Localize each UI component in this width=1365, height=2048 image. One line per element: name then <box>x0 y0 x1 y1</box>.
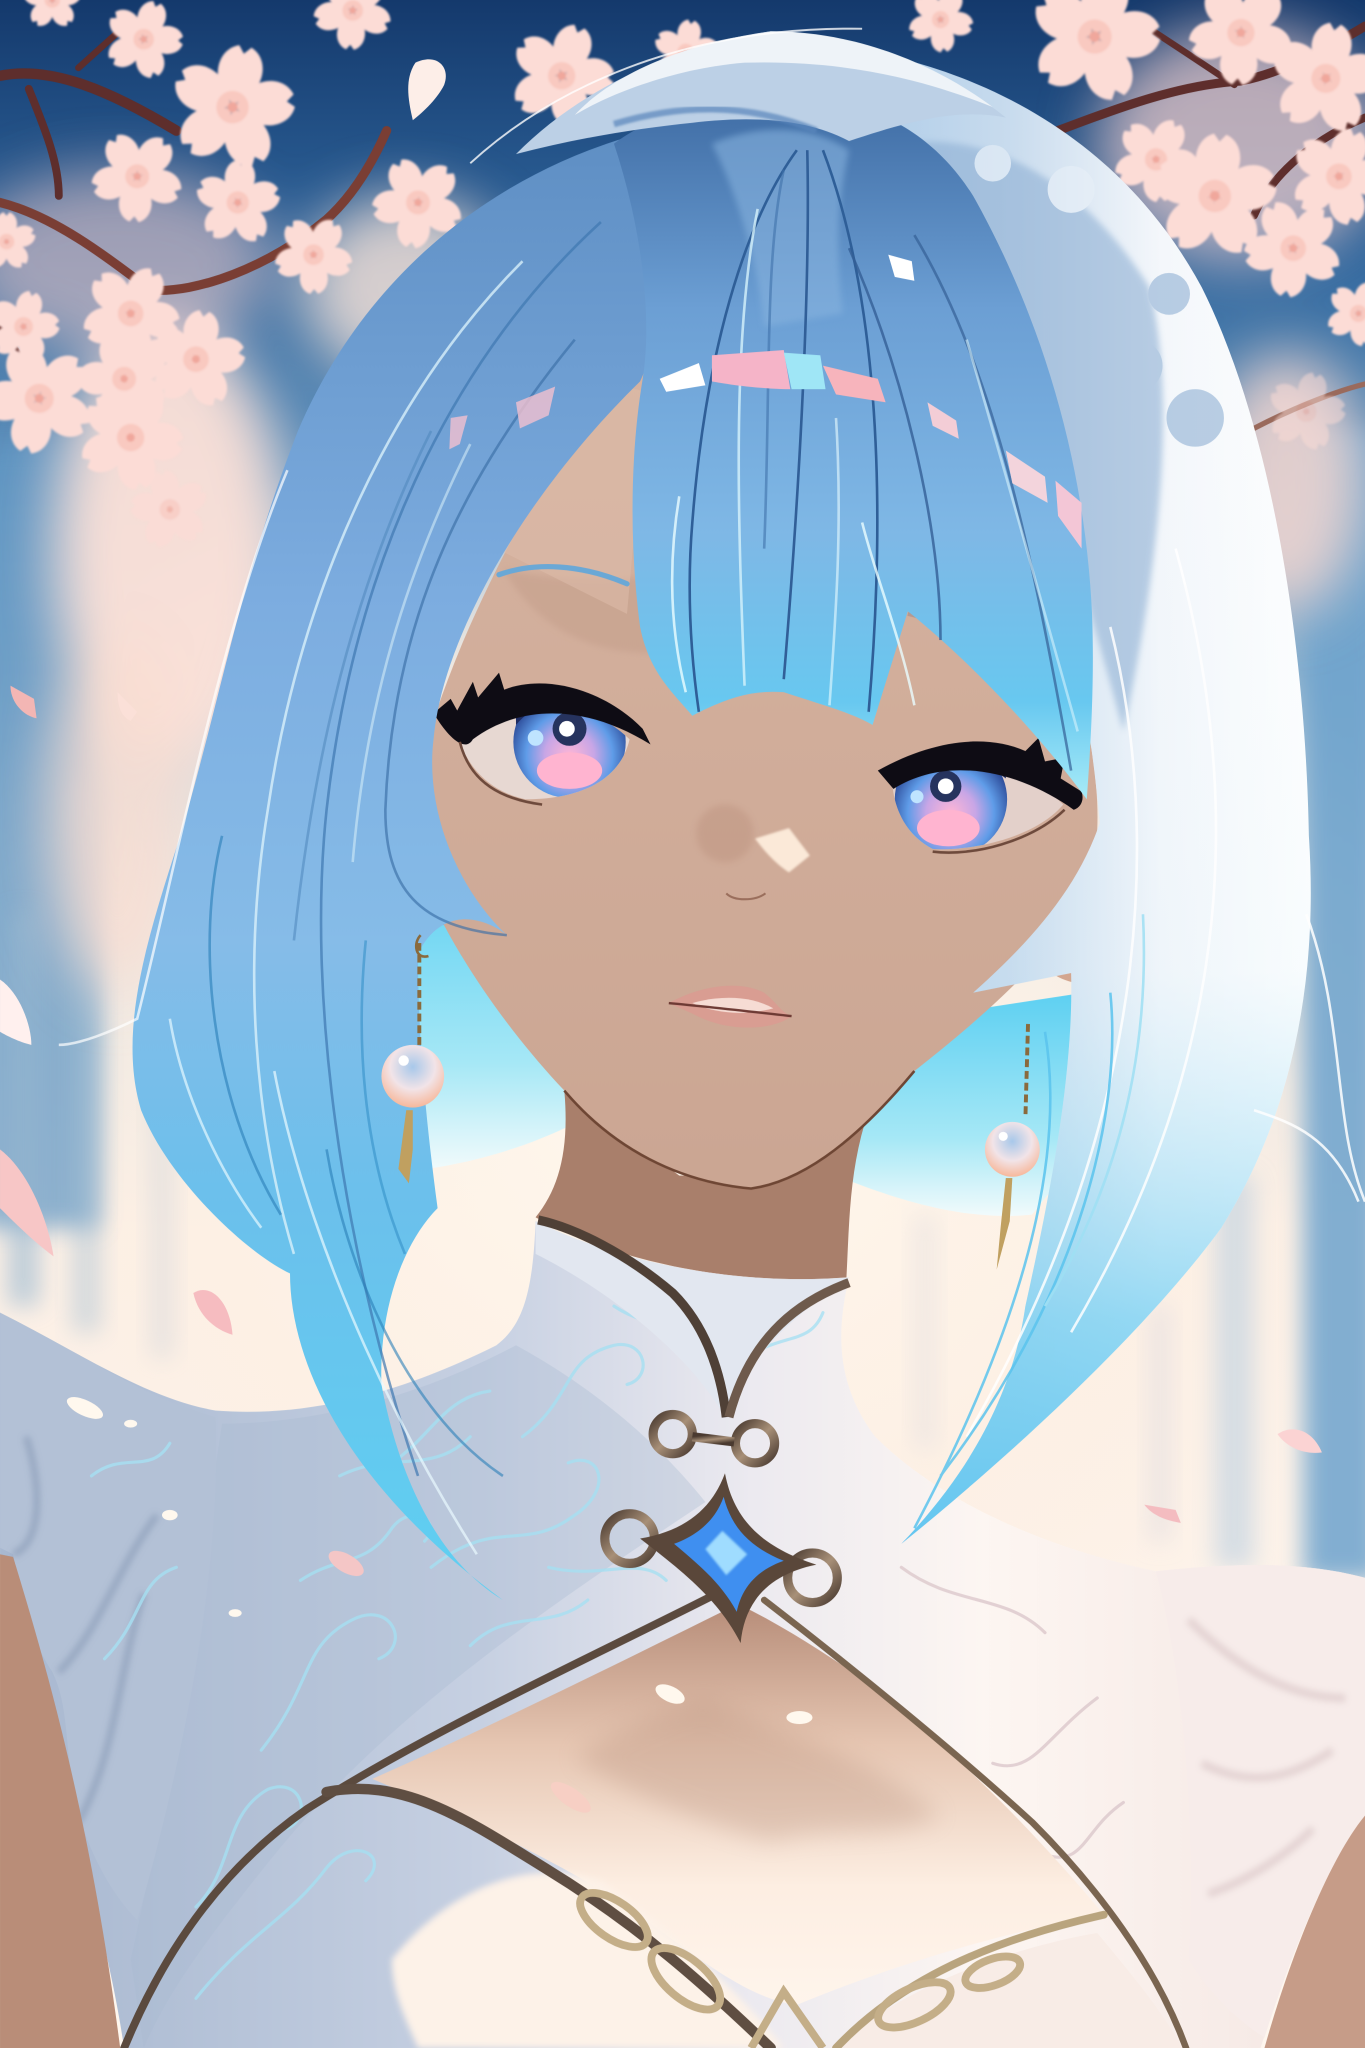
bang strands <box>672 150 1078 771</box>
left earring <box>381 935 444 1183</box>
nose light and shadow <box>696 805 810 899</box>
right earring <box>985 1024 1040 1270</box>
forehead shading <box>496 385 653 653</box>
left sleeve ruffle <box>0 1313 216 1920</box>
crown and bangs <box>614 96 1093 799</box>
back hair behind neck <box>398 862 1084 1216</box>
hair crown pale rim <box>470 29 1006 163</box>
left eye <box>434 673 650 805</box>
left eyebrow <box>499 567 627 584</box>
high collar <box>536 1220 849 1417</box>
dress swirl embroidery <box>91 1287 1123 1998</box>
chinese knot button <box>605 1415 837 1603</box>
right ear <box>1032 869 1183 985</box>
falling petals <box>0 59 1322 1523</box>
bronze dress trim straps <box>124 1596 1186 2048</box>
cherry blossoms: upper right cluster <box>1010 0 1365 461</box>
gold lace ornament <box>571 1883 1024 2048</box>
flower shadows on hair <box>901 142 1224 731</box>
right hair mass <box>771 39 1311 1544</box>
jaw line <box>564 1071 914 1189</box>
right hair strands <box>914 549 1365 1528</box>
blurred blossom haze <box>0 26 1365 993</box>
tree branches <box>0 26 1365 428</box>
left hair strands <box>59 222 601 1554</box>
hair pink and white gloss band <box>449 255 1082 549</box>
star clasp gem <box>640 1473 816 1643</box>
right sleeve ruffle <box>1156 1565 1365 2038</box>
face <box>413 372 1097 1189</box>
right eyebrow <box>908 614 1045 679</box>
sunlight spots on dress and chest <box>64 1393 812 1818</box>
cherry blossoms: upper left cluster <box>0 0 485 565</box>
left ear <box>398 836 447 925</box>
bare arms <box>0 1554 1365 2048</box>
lower bodice light patch <box>392 1873 1182 2048</box>
dress: body and shoulders <box>0 1221 1365 2048</box>
neck <box>536 1091 865 1279</box>
right eye <box>878 738 1083 856</box>
chest skin opening <box>372 1604 1104 2005</box>
cherry blossoms: top centre cluster <box>491 0 987 145</box>
mouth <box>669 986 792 1028</box>
left hair mass <box>132 137 658 1600</box>
